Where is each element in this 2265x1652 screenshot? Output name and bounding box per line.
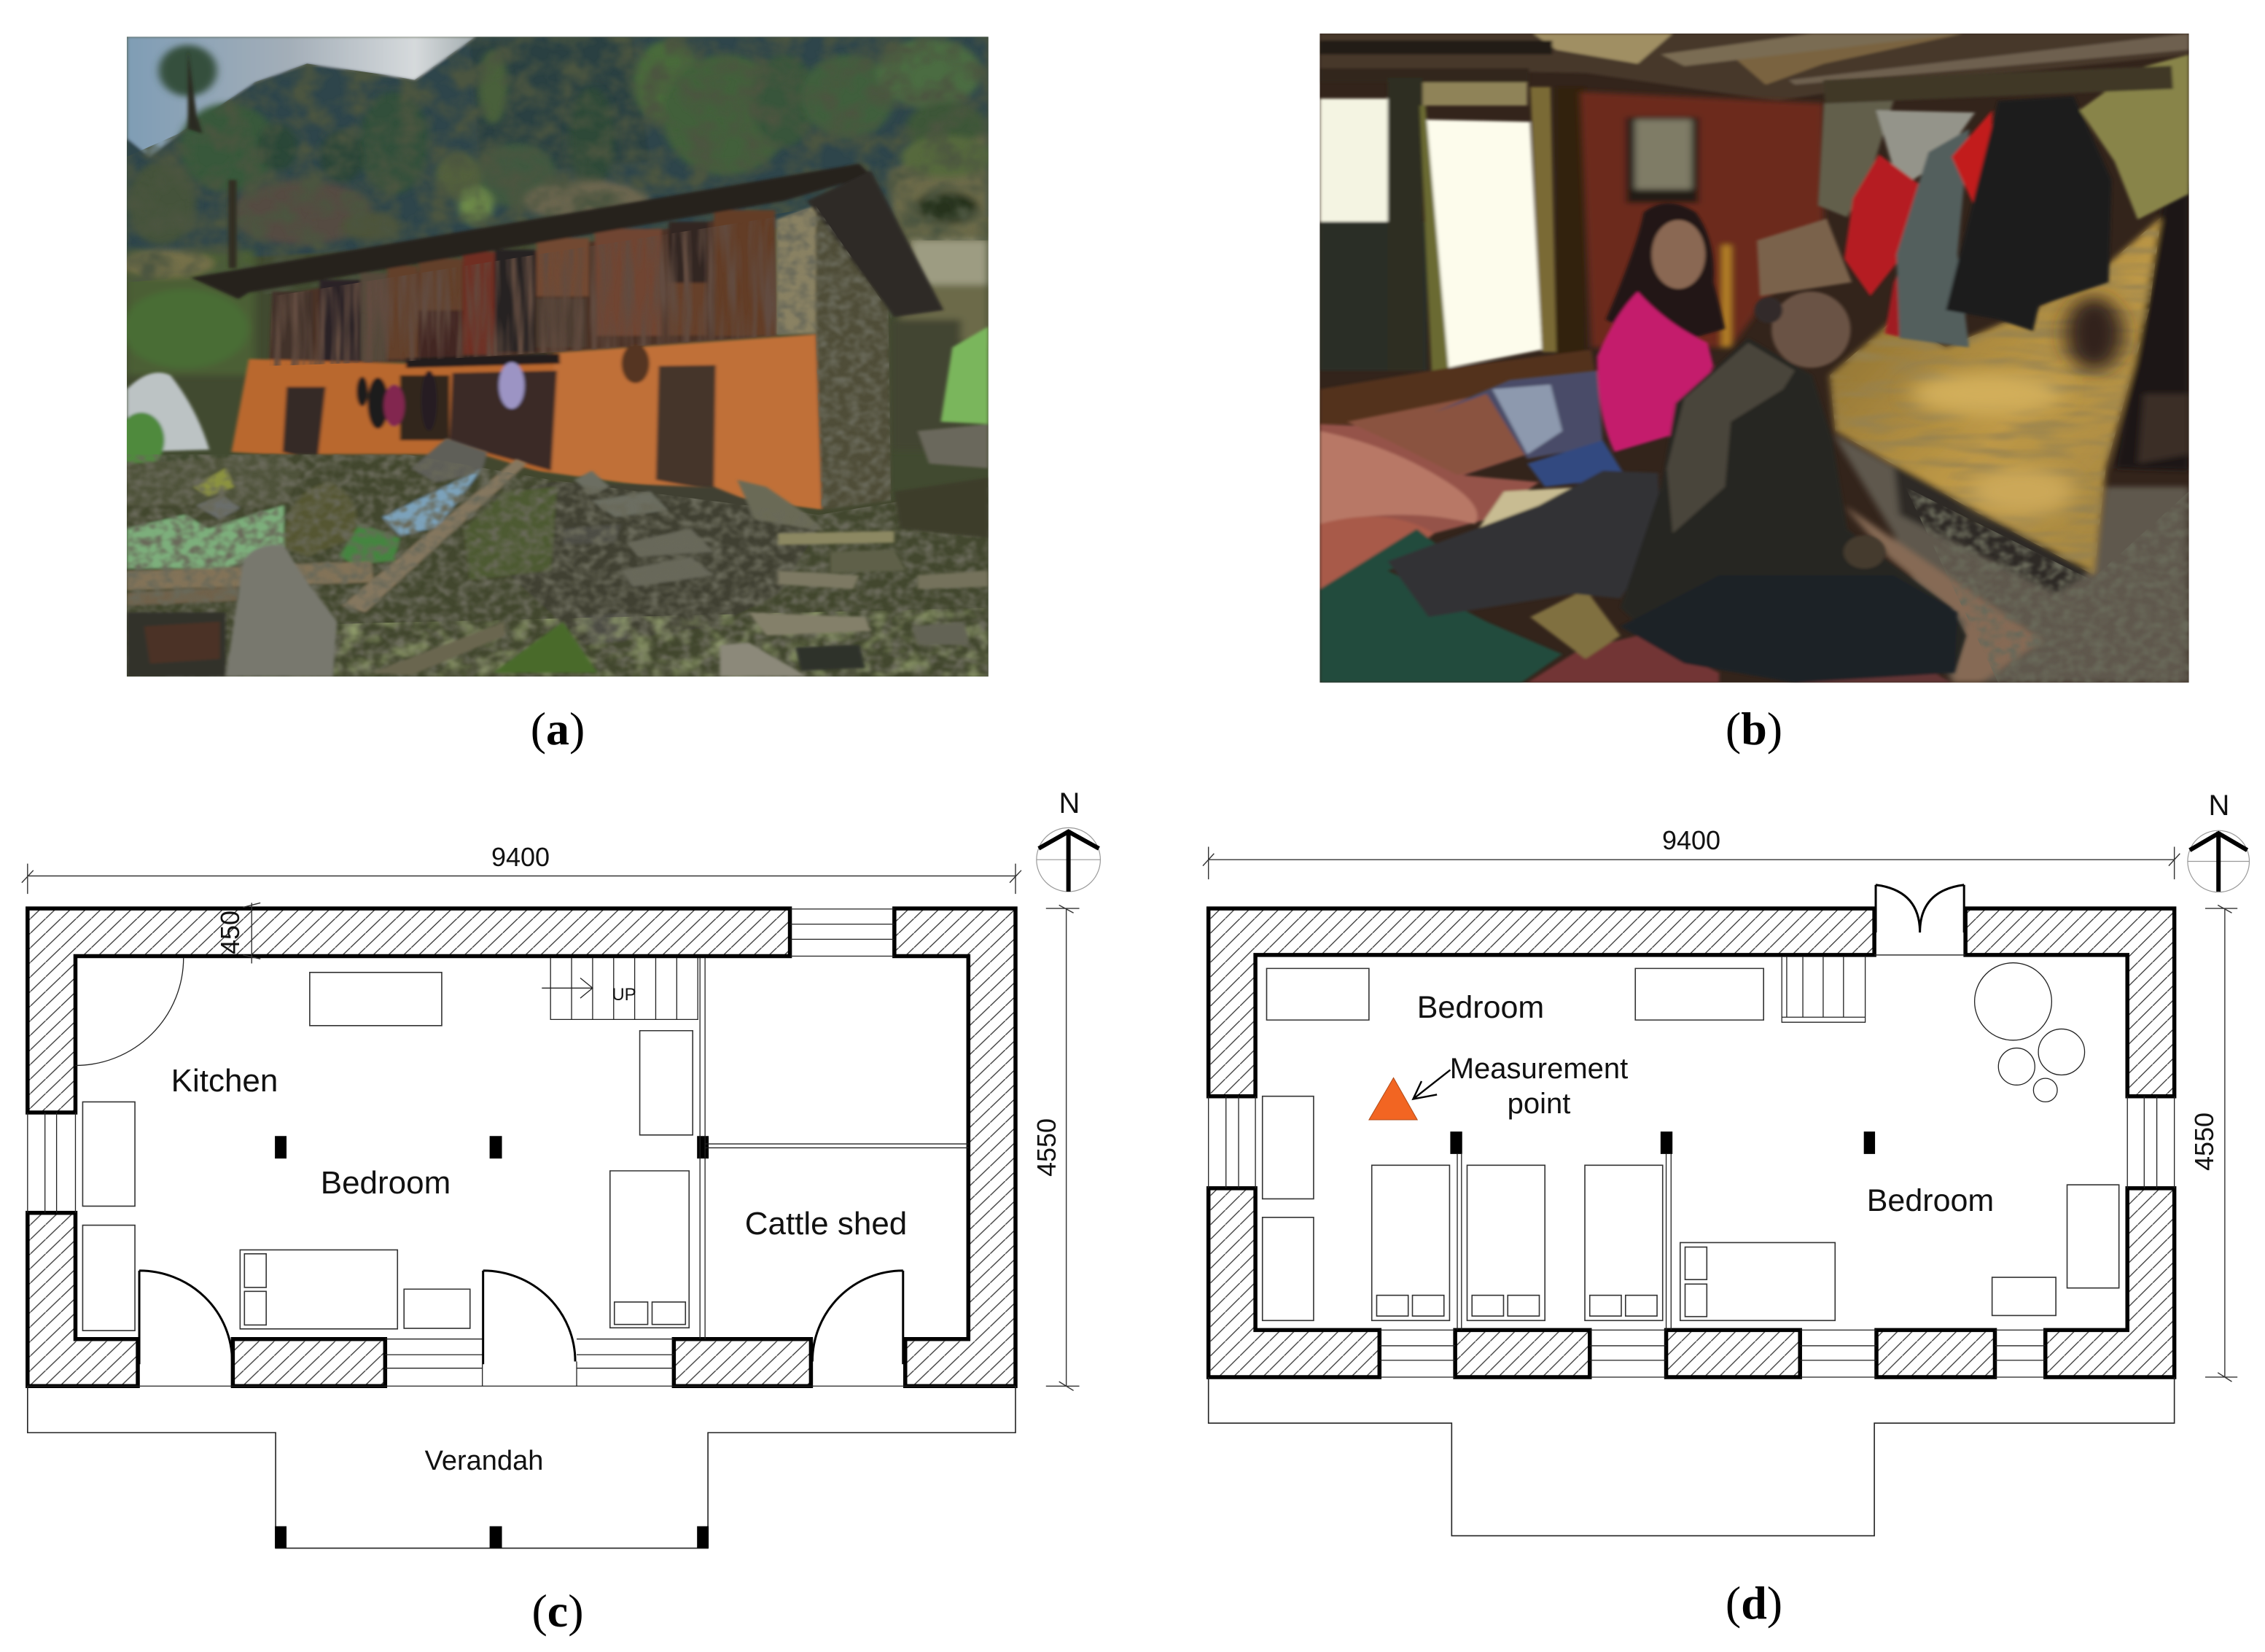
caption (a): (a) [531, 703, 585, 755]
doors [75, 958, 903, 1386]
dimension lines [22, 864, 1080, 1390]
label: Bedroom: Bedroom [321, 1165, 451, 1201]
woman: hair, face and pink top [1606, 203, 1725, 347]
dimension lines [1203, 847, 2237, 1382]
furniture [1263, 968, 2119, 1320]
photo (b): interior with two seated people [1319, 34, 2189, 682]
windows [1209, 1096, 2175, 1377]
floor plan (d): upper floor [1203, 790, 2250, 1536]
label: Measurement point: Measurement [1450, 1053, 1628, 1085]
ground texture [127, 454, 989, 677]
foliage texture [127, 36, 989, 319]
label: Bedroom south: Bedroom [1867, 1183, 1994, 1218]
label: Cattle shed: Cattle shed [745, 1206, 907, 1242]
floor plan (c): ground floor [22, 787, 1100, 1548]
posts and partitions [1450, 1131, 1875, 1330]
label: Kitchen: Kitchen [171, 1063, 278, 1099]
label: 450: 450 [215, 911, 245, 954]
clothes on the wall [1818, 101, 1894, 217]
label: Measurement point: point [1508, 1088, 1570, 1120]
label: 9400: 9400 [1662, 825, 1720, 855]
plan (d) walls and fittings [1203, 830, 2250, 1536]
bedding [1319, 394, 1539, 603]
north symbol [1037, 827, 1100, 892]
plan (c) walls and fittings [22, 827, 1100, 1548]
caption (b): (b) [1726, 703, 1782, 755]
label: 4550: 4550 [1032, 1118, 1061, 1177]
timber plank grain [269, 217, 777, 366]
man: coat, hat and face [1621, 338, 1966, 682]
windows [28, 909, 1015, 1386]
stairs [542, 958, 698, 1019]
double door [1874, 885, 1965, 955]
label: Verandah: Verandah [425, 1446, 543, 1476]
label: Bedroom north: Bedroom [1417, 990, 1544, 1025]
photo (a): house exterior on a hillside [118, 36, 993, 677]
furniture [82, 973, 693, 1330]
storage jars [1975, 963, 2085, 1102]
caption (c): (c) [531, 1585, 584, 1637]
caption (d): (d) [1726, 1577, 1782, 1629]
walls [1209, 908, 2175, 1377]
north symbol [2188, 830, 2250, 892]
label: 4550: 4550 [2189, 1113, 2219, 1171]
walls [28, 908, 1015, 1386]
arrow to measurement point [1413, 1070, 1450, 1099]
measurement point triangle [1369, 1078, 1417, 1120]
stone wall texture on gable [777, 206, 892, 519]
beds [1372, 1165, 1835, 1320]
label: N: N [1059, 787, 1080, 819]
verandah outline [1209, 1377, 2175, 1536]
label: N: N [2209, 790, 2229, 822]
partitions [700, 958, 968, 1339]
mud wall ridges [1830, 217, 2161, 575]
stairs [1782, 956, 1866, 1022]
verandah outline and columns [28, 1136, 1015, 1548]
label: UP: UP [612, 985, 636, 1005]
label: 9400: 9400 [491, 842, 550, 872]
